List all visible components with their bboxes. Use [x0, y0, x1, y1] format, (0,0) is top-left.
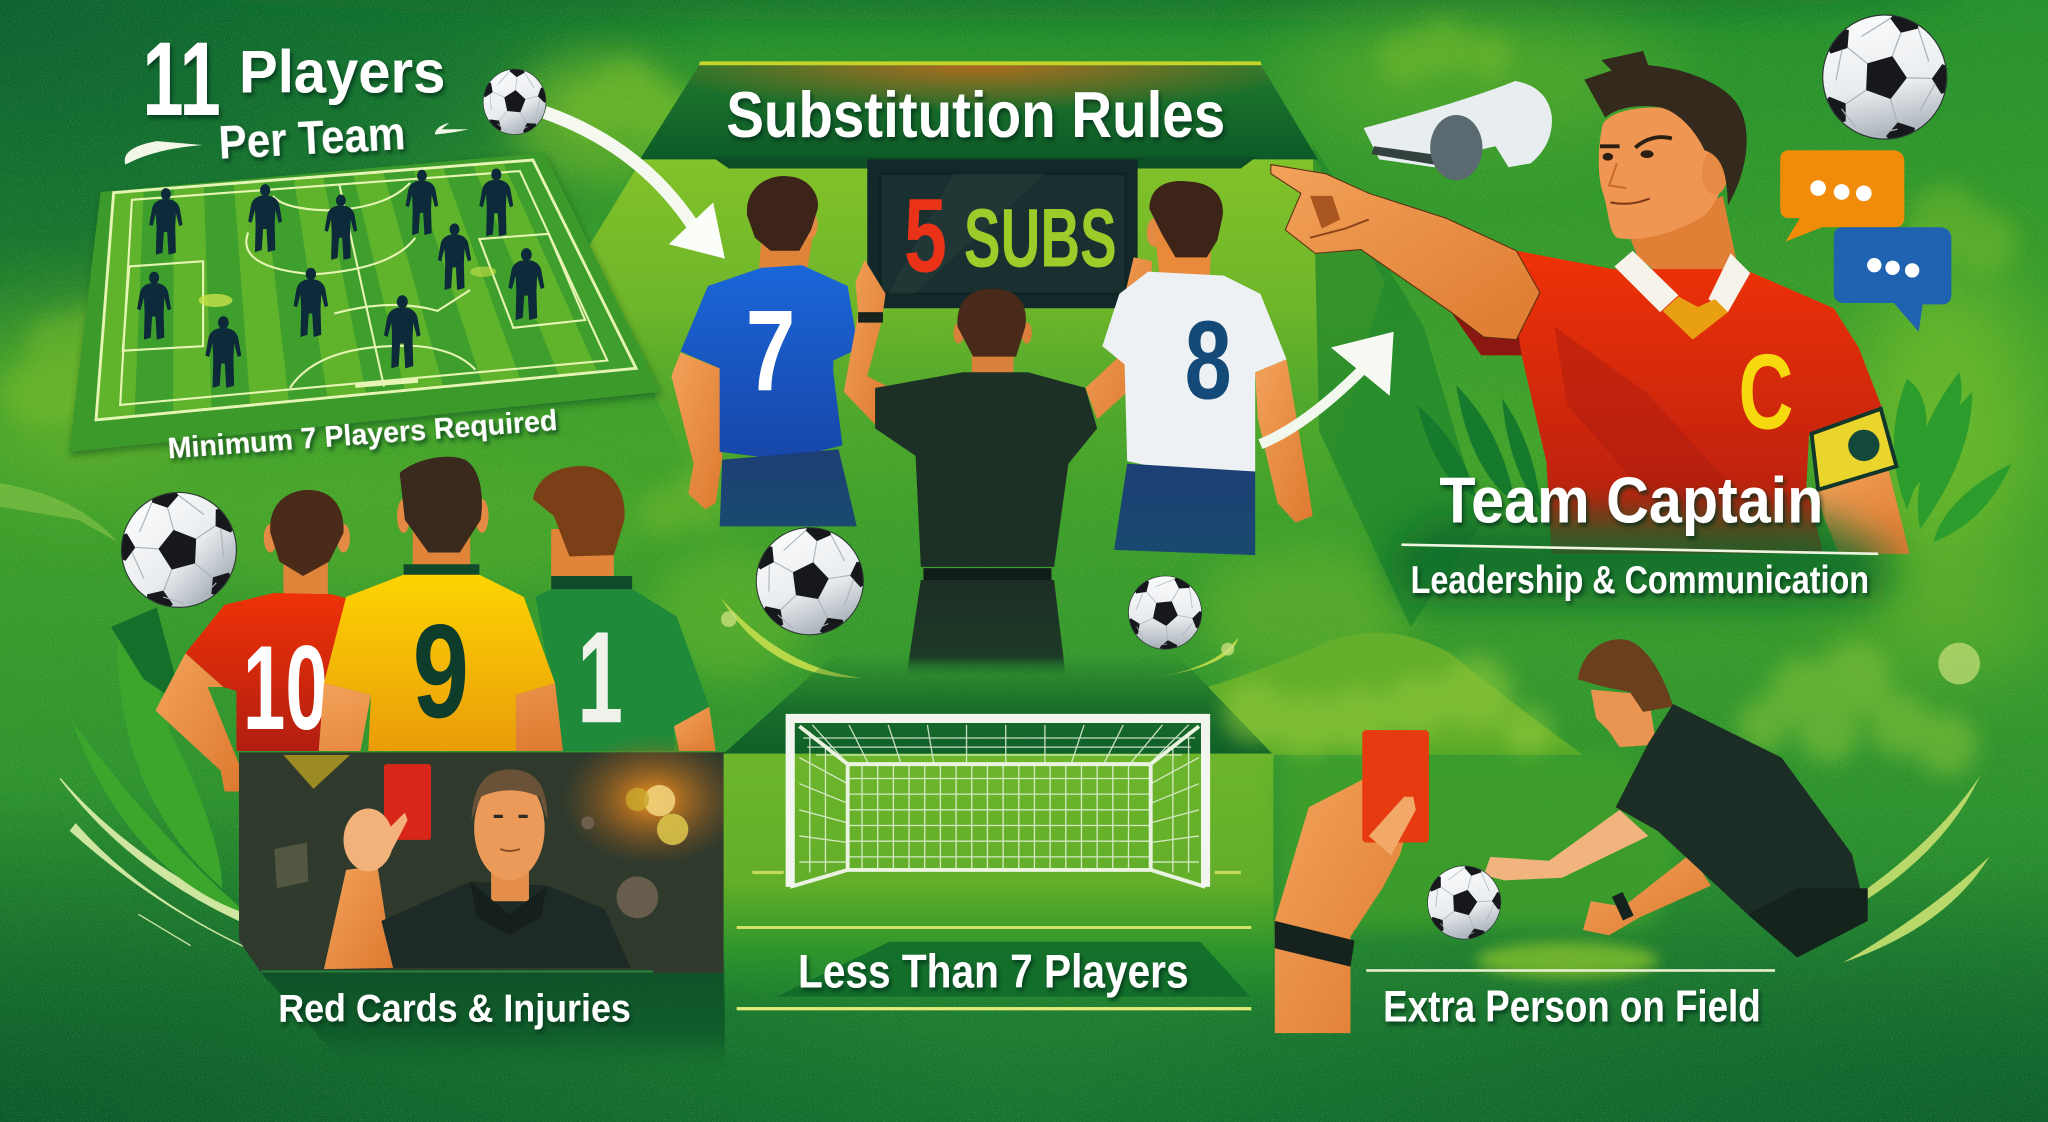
decorative leaves around captain: [1417, 372, 2011, 542]
caption: minimum players: Minimum 7 Players Required: [167, 404, 558, 465]
panel caption: Extra Person on Field: [1383, 982, 1761, 1031]
scoreboard: 5 subs: [867, 159, 1138, 308]
header: 11 players per team: Players: [239, 39, 445, 106]
decorative swooshes and dots: [60, 598, 1989, 963]
referee bending to ball: [1484, 639, 1868, 957]
jersey number: 8: [1185, 297, 1232, 422]
captain C badge: C: [1738, 331, 1793, 451]
captain figure: [1271, 51, 1910, 554]
left leaves: [72, 607, 248, 914]
kit group: three players: [155, 457, 716, 792]
player: white 8: [1102, 181, 1313, 555]
player: yellow 9: [319, 457, 563, 751]
speech bubble: orange: [1780, 150, 1904, 242]
icon: right swoosh: [435, 123, 469, 135]
referee holding board: [844, 260, 1097, 677]
panel: red cards and injuries: [239, 734, 744, 1074]
soccer balls mid: [99, 471, 1222, 667]
player: green 1: 1: [577, 604, 623, 750]
header: 11 players per team: Per Team: [217, 106, 407, 169]
panel caption: Red Cards & Injuries: [278, 987, 631, 1030]
title banner: [588, 61, 1318, 242]
icon: goal: [790, 718, 1206, 887]
hand holding red card: [1275, 730, 1429, 1033]
player: blue 7: [671, 176, 858, 526]
title text: Substitution Rules: [726, 78, 1225, 151]
arrow: toward captain: [1260, 332, 1394, 444]
team captain heading: Team Captain: [1439, 463, 1823, 536]
captain armband: [1812, 409, 1896, 490]
panel: less than 7 players: [724, 653, 1273, 1014]
header: 11 players per team: 11: [142, 21, 221, 138]
icon: soccer ball top right: [1796, 0, 1975, 162]
scoreboard: 5 subs: 5: [904, 178, 947, 295]
panel caption: Less Than 7 Players: [798, 944, 1189, 997]
arrow: from ball to substitution: [545, 112, 725, 259]
substitution panel backdrop: [588, 64, 1482, 627]
player: yellow 9: 9: [413, 597, 469, 746]
icon: small ball: [476, 62, 553, 139]
player: red 10: [155, 490, 350, 792]
player silhouettes: [137, 168, 544, 388]
leadership text: Leadership & Communication: [1411, 559, 1869, 602]
icon: ball at feet: [1414, 852, 1515, 950]
scoreboard: 5 subs: SUBS: [964, 190, 1117, 284]
header: 11 players per team: [125, 21, 469, 169]
captain caption: [1384, 463, 1894, 603]
panel caption: [737, 926, 1251, 1010]
panel: extra person on field: [1208, 633, 1977, 1033]
speech bubble: blue: [1834, 227, 1951, 332]
formation pitch: [69, 153, 661, 465]
icon: whistle: [1364, 81, 1552, 180]
referee with red card: [324, 764, 631, 969]
referee right arm: [1085, 257, 1152, 419]
player: green 1: [533, 466, 716, 751]
player: red 10: 10: [243, 621, 328, 755]
jersey number: 7: [746, 288, 795, 416]
icon: left swoosh: [125, 141, 202, 165]
